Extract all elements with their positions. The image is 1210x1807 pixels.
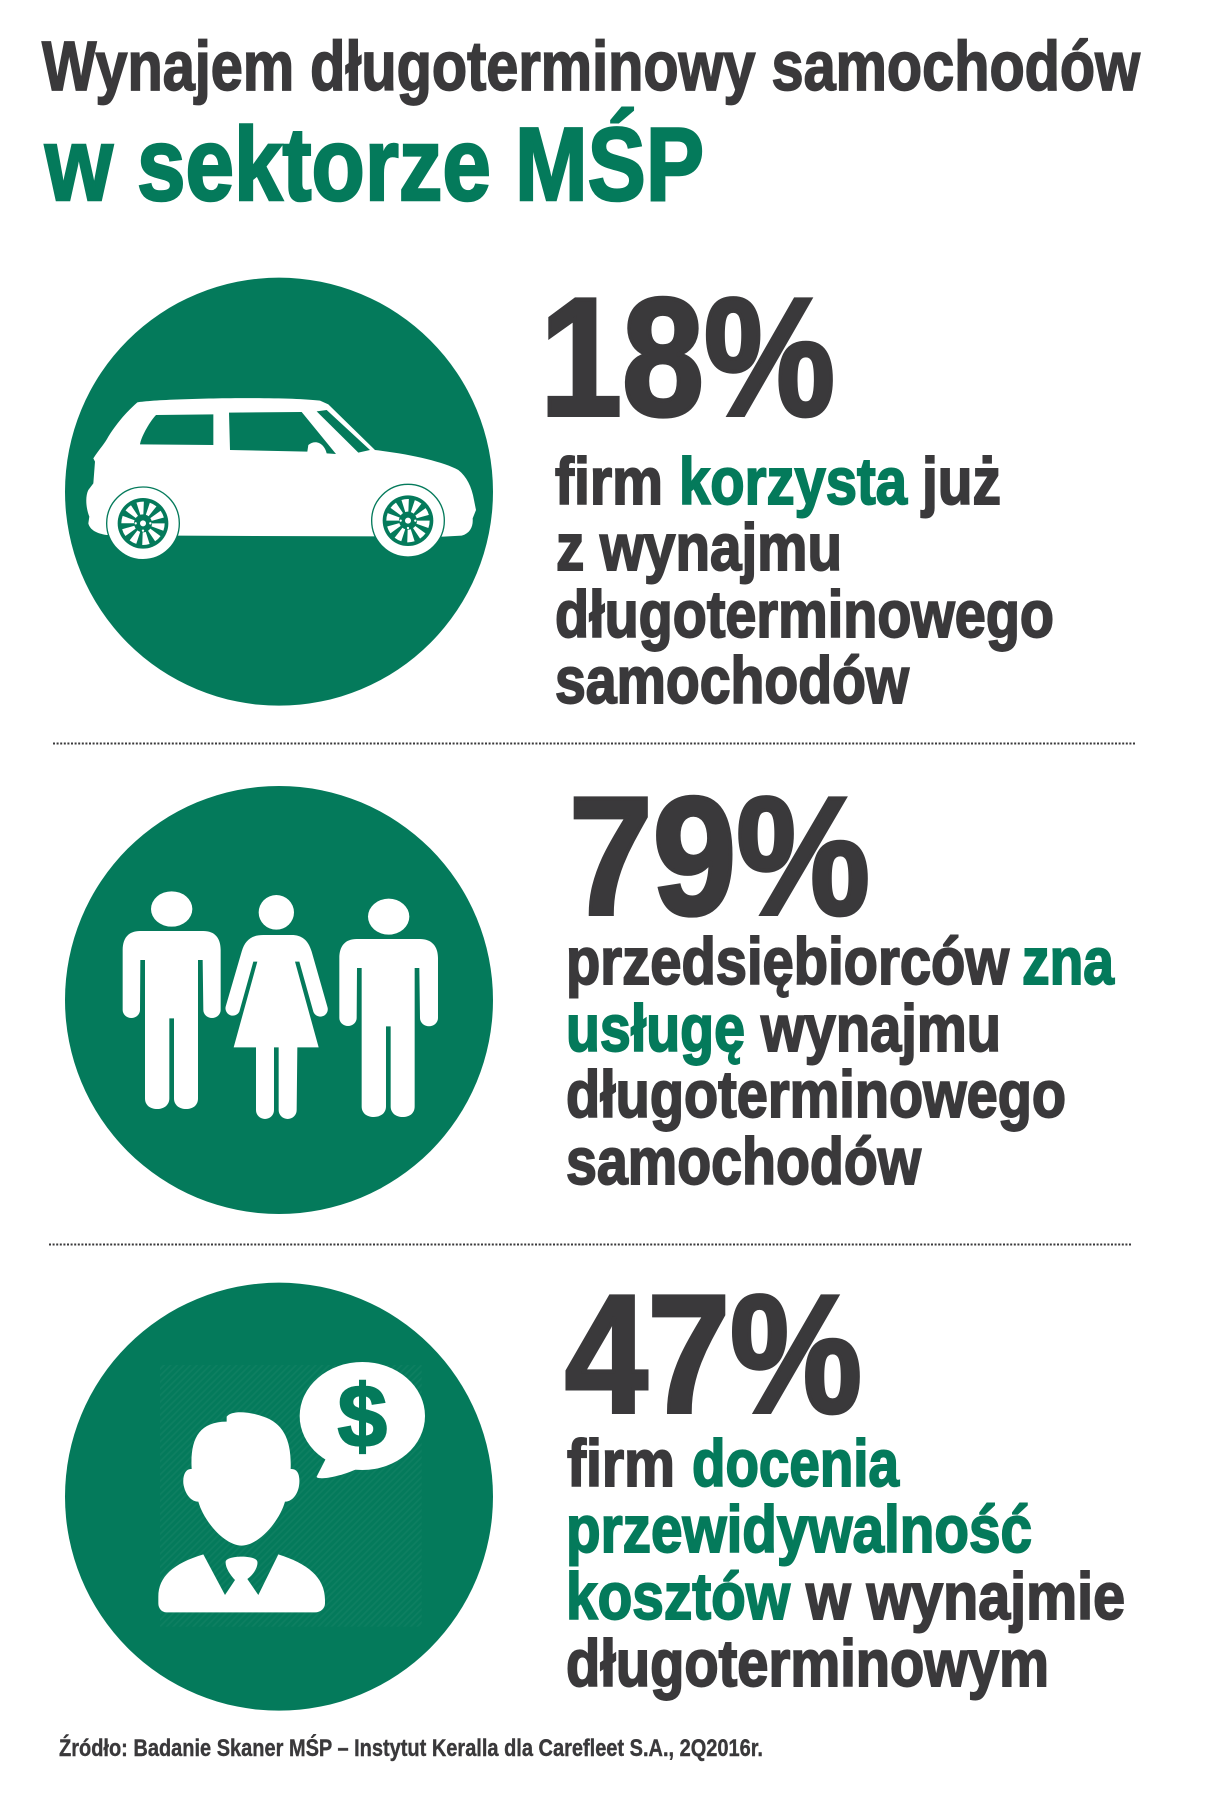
panel: stat 47%: [65, 1260, 1125, 1711]
description 18%: długoterminowego: [555, 577, 1054, 651]
description 79%: przedsiębiorców: [566, 924, 1010, 998]
description 79%: usługę: [566, 991, 745, 1065]
divider: [49, 1244, 1131, 1246]
icon: businessman with dollar speech bubble in green circle: $: [338, 1367, 387, 1466]
description 18%: firm: [555, 444, 663, 518]
icon: car in green circle: [65, 278, 493, 706]
description 47%: docenia: [692, 1426, 900, 1500]
big number 47%: 47%: [565, 1260, 862, 1448]
description 79%: zna: [1022, 924, 1115, 998]
icon: businessman with dollar speech bubble in green circle: [65, 1283, 493, 1711]
description 18%: samochodów: [555, 643, 910, 717]
description 47%: [566, 1426, 1125, 1700]
description 79%: długoterminowego: [566, 1057, 1066, 1131]
description 79%: [566, 924, 1115, 1198]
divider: [53, 742, 1135, 744]
title: [42, 27, 1140, 223]
description 47%: przewidywalność: [566, 1492, 1032, 1566]
source note: Źródło: Badanie Skaner MŚP – Instytut Keralla dla Carefleet S.A., 2Q2016r.: [59, 1734, 763, 1762]
description 47%: w wynajmie: [805, 1559, 1125, 1633]
title: w sektorze MŚP: [44, 107, 704, 223]
panel: stat 18%: [65, 263, 1054, 717]
description 18%: [555, 444, 1054, 717]
description 79%: samochodów: [566, 1124, 922, 1198]
big number 18%: 18%: [540, 263, 835, 451]
description 79%: wynajmu: [760, 991, 1001, 1065]
panel: stat 79%: [65, 762, 1115, 1214]
icon: three people in green circle: [65, 786, 493, 1214]
description 47%: kosztów: [566, 1559, 791, 1633]
big number 79%: 79%: [569, 762, 870, 950]
description 18%: korzysta: [679, 444, 908, 518]
description 18%: z wynajmu: [556, 510, 842, 584]
description 47%: firm: [567, 1426, 675, 1500]
description 18%: już: [920, 444, 1001, 518]
description 47%: długoterminowym: [566, 1626, 1049, 1700]
